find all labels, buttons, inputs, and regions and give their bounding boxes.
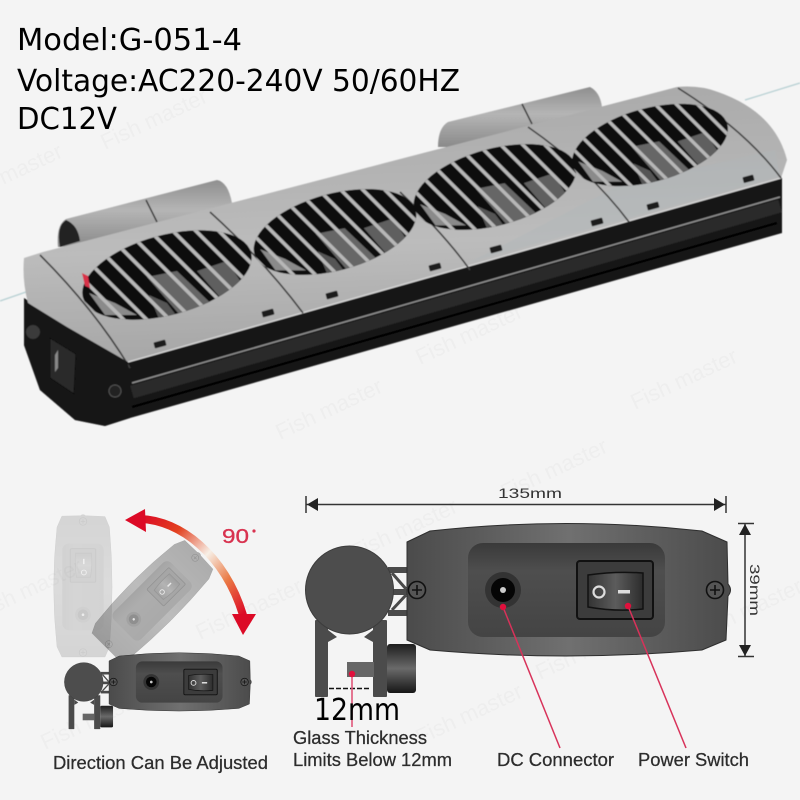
red leader: DC connector	[500, 604, 560, 748]
device body large	[407, 524, 730, 656]
width dimension 135mm	[306, 485, 726, 513]
watermarks: Fish master	[627, 343, 741, 415]
watermarks: Fish master	[532, 613, 646, 685]
degree mark	[252, 529, 256, 533]
ghost position 45 degrees	[87, 534, 219, 666]
caption: glass thickness: Limits Below 12mm	[293, 750, 452, 770]
watermarks: Fish master	[347, 493, 461, 565]
thin aquarium glass line right	[745, 83, 800, 100]
thin aquarium glass line left	[0, 292, 26, 301]
90 degree label: 90	[222, 526, 249, 548]
reflection on top surface	[470, 150, 780, 262]
arrowhead top	[125, 509, 146, 532]
title: model and voltage	[17, 23, 460, 137]
12mm label: 12mm	[314, 693, 400, 728]
small clamp	[64, 663, 113, 729]
watermarks: Fish master	[192, 573, 306, 645]
segment dividers	[40, 88, 781, 368]
width dimension 135mm: 135mm	[498, 485, 562, 501]
top grille surface	[24, 87, 787, 362]
title: model and voltage: Voltage:AC220-240V 50/60HZ	[17, 64, 460, 99]
watermarks: Fish master	[272, 373, 386, 445]
front edge highlight lines	[128, 178, 781, 407]
panel: direction adjustment diagram	[53, 509, 268, 773]
watermarks: Fish master	[37, 683, 151, 755]
fan 4	[493, 90, 794, 200]
watermarks: Fish master	[412, 678, 526, 750]
small device body	[109, 653, 251, 711]
caption: DC connector: DC Connector	[497, 750, 614, 770]
glass thickness dashed marker	[329, 688, 369, 690]
red spot in fan 1	[82, 273, 90, 288]
title: model and voltage: Model:G-051-4	[17, 23, 242, 58]
dark front body	[24, 178, 782, 426]
grille slots	[153, 175, 755, 348]
caption: direction: Direction Can Be Adjusted	[53, 753, 268, 773]
caption: power switch: Power Switch	[638, 750, 749, 770]
rear clamp right	[438, 87, 602, 147]
fan 3	[331, 129, 645, 245]
product photo: four-fan cooling unit	[0, 83, 800, 426]
title: model and voltage: DC12V	[17, 102, 117, 137]
arrowhead bottom	[232, 614, 256, 635]
red leader: power switch	[625, 603, 686, 748]
red leader: glass thickness	[349, 671, 355, 727]
watermarks: Fish master	[97, 83, 211, 155]
panel: dimension diagram	[293, 485, 763, 770]
rear clamp left	[58, 180, 232, 247]
height dimension 39mm: 39mm	[747, 564, 763, 616]
watermarks: Fish master	[497, 433, 611, 505]
caption: glass thickness: Glass Thickness	[293, 728, 427, 748]
end cap with switch	[24, 300, 130, 426]
clamp large	[306, 546, 416, 697]
red rotation arc	[140, 519, 243, 615]
watermarks: Fish master	[412, 298, 526, 370]
ghost position vertical	[54, 515, 112, 657]
fan 1	[0, 215, 323, 335]
fan 2	[171, 174, 485, 290]
caption: glass thickness	[293, 728, 452, 770]
height dimension 39mm	[738, 523, 763, 657]
